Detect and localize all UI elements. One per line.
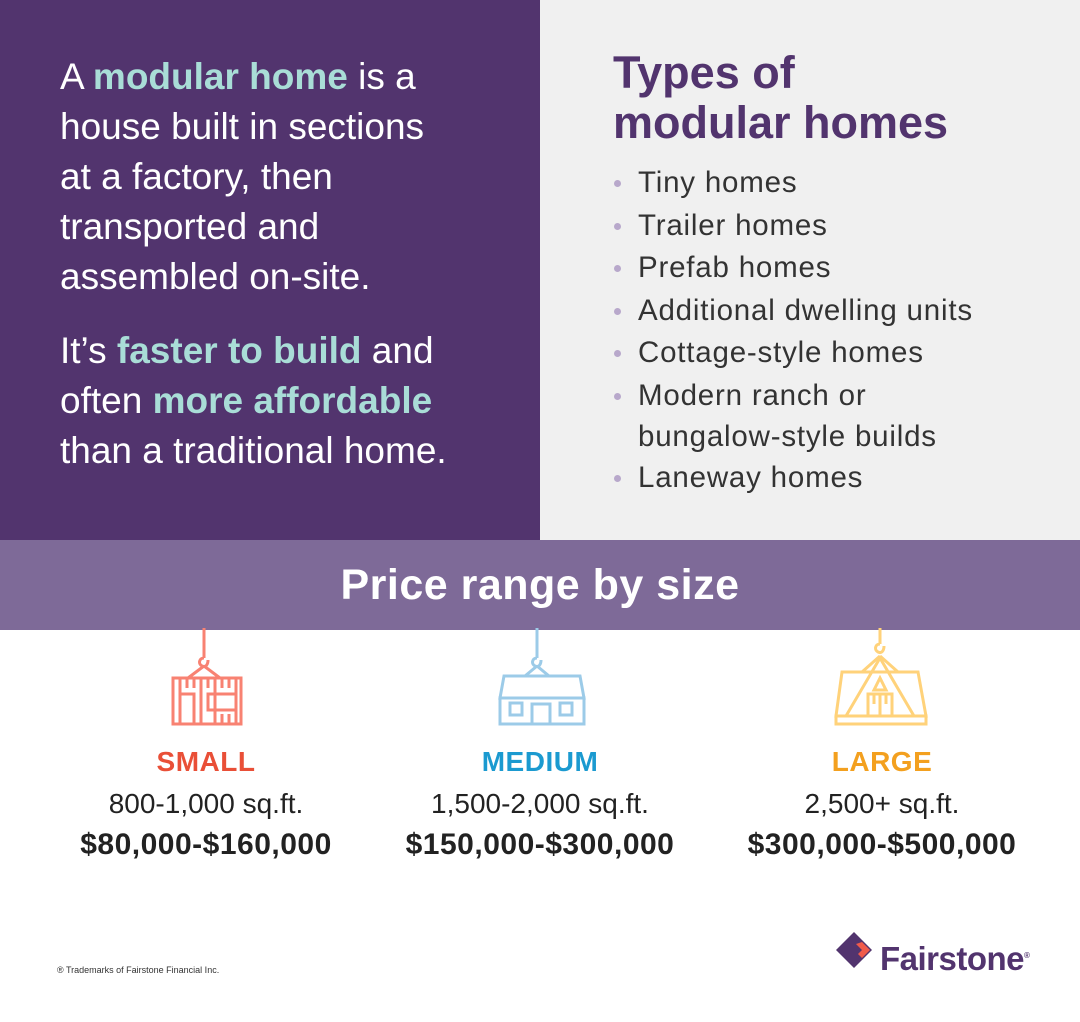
column: medium bbox=[406, 746, 674, 861]
heading: types bbox=[613, 47, 948, 148]
column: small: SMALL bbox=[157, 746, 255, 777]
text block: definition: at a factory, then bbox=[60, 156, 333, 197]
text block: definition: house built in sections bbox=[60, 106, 424, 147]
column: large: 2,500+ sq.ft. bbox=[805, 788, 959, 819]
icon: large a-frame bbox=[834, 628, 928, 726]
column: large: LARGE bbox=[832, 746, 932, 777]
heading: types: Types of bbox=[613, 47, 795, 98]
list: types: Cottage-style homes bbox=[638, 336, 924, 369]
text block: benefits: often more affordable bbox=[60, 380, 432, 421]
banner: price range: Price range by size bbox=[340, 561, 740, 609]
column: large: $300,000-$500,000 bbox=[748, 828, 1016, 861]
column: medium: $150,000-$300,000 bbox=[406, 828, 674, 861]
list: types: Prefab homes bbox=[638, 251, 831, 284]
text block: definition: assembled on-site. bbox=[60, 256, 371, 297]
list: types bbox=[614, 166, 973, 494]
list: types: Additional dwelling units bbox=[638, 294, 973, 326]
footnote: ® Trademarks of Fairstone Financial Inc. bbox=[57, 965, 219, 975]
column: small bbox=[80, 746, 332, 861]
list: types: Trailer homes bbox=[638, 208, 828, 242]
list: types: Modern ranch or bbox=[638, 378, 866, 412]
list: types: Tiny homes bbox=[638, 166, 797, 199]
panel: definition bbox=[0, 0, 540, 540]
list: types: bungalow-style builds bbox=[638, 420, 937, 452]
column: small: $80,000-$160,000 bbox=[80, 828, 332, 861]
icon: medium house bbox=[498, 628, 586, 726]
logo: Fairstone bbox=[836, 932, 1030, 977]
logo: Fairstone: Fairstone® bbox=[880, 940, 1029, 977]
icon: small container bbox=[172, 628, 242, 726]
text block: benefits: It’s faster to build and bbox=[60, 330, 434, 371]
banner: price range bbox=[0, 540, 1080, 630]
text block: definition: transported and bbox=[60, 206, 319, 247]
panel: types bbox=[540, 0, 1080, 540]
text block: definition bbox=[60, 56, 424, 297]
text block: benefits bbox=[60, 330, 447, 471]
column: small: 800-1,000 sq.ft. bbox=[109, 788, 303, 819]
list: types: Laneway homes bbox=[638, 460, 863, 494]
column: medium: 1,500-2,000 sq.ft. bbox=[431, 788, 649, 819]
column: large bbox=[748, 746, 1016, 861]
column: medium: MEDIUM bbox=[482, 746, 598, 777]
text block: benefits: than a traditional home. bbox=[60, 430, 447, 471]
text block: definition: A modular home is a bbox=[60, 56, 416, 97]
heading: types: modular homes bbox=[613, 97, 948, 148]
